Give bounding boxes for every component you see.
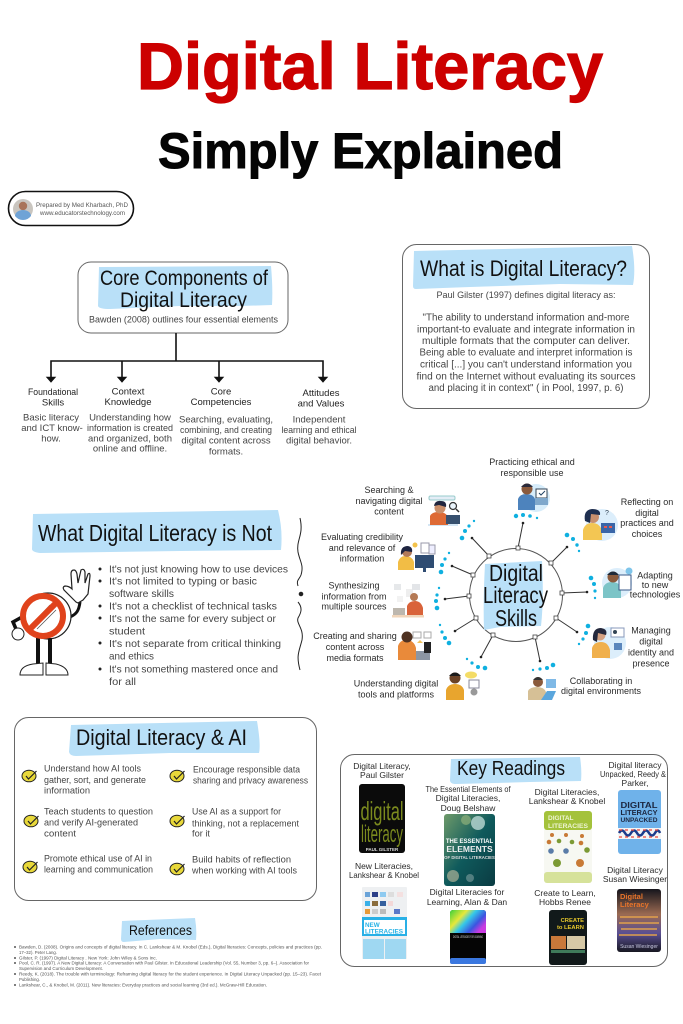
book label: Alan and Dan — [427, 887, 507, 907]
skill label: adapting: technologies — [630, 590, 681, 600]
hub title — [483, 560, 548, 631]
book cover: Create to Learn — [549, 910, 587, 965]
skill label: searching — [355, 485, 423, 516]
book label: Alan and Dan: Digital Literacies for — [430, 887, 504, 897]
skill label: searching: content — [374, 506, 404, 516]
reference list: Supervision and Curriculum Development. — [19, 966, 103, 971]
book cover: Essential Elements: OF DIGITAL LITERACIES — [444, 855, 495, 860]
book cover: New Literacies: LITERACIES — [365, 928, 403, 936]
component: foundational skills: Foundational — [28, 387, 78, 398]
skill label: understanding tools: tools and platforms — [358, 690, 435, 700]
reference list — [14, 944, 322, 988]
book cover: Create to Learn: to LEARN — [557, 925, 584, 931]
panel: what digital literacy is not — [12, 510, 303, 688]
bullet list: student — [109, 626, 145, 638]
book cover: Digital Literacy Wiesinger: Susan Wiesinger — [620, 944, 658, 950]
AI list: right column: sharing and privacy awareness — [193, 776, 308, 786]
skill label: reflecting: choices — [632, 529, 663, 539]
heading highlight — [450, 757, 581, 784]
illustration: adapting — [602, 568, 632, 598]
check icons — [22, 770, 184, 875]
heading: what digital literacy is not: What Digital Literacy is Not — [38, 520, 273, 546]
illustration: searching — [428, 496, 460, 526]
heading: core components: Digital Literacy — [120, 289, 247, 312]
book label: Lankshear Knobel: Lankshear & Knobel — [529, 796, 605, 806]
book cover: Digital Literacy Wiesinger: Digital — [620, 892, 643, 901]
AI list: right column: Use AI as a support for — [192, 806, 282, 818]
skill label: adapting: to new — [642, 580, 669, 590]
hub title: Digital — [489, 560, 543, 586]
book cover: Digital Literacy Wiesinger: Literacy — [620, 900, 650, 909]
book label: Hobbs: Hobbs Renee — [539, 897, 591, 907]
AI list: left column: content — [44, 828, 76, 840]
bullet list: It's not limited to typing or basic — [109, 576, 257, 588]
heading: references: References — [129, 922, 192, 938]
bullet list: and ethics — [109, 652, 154, 662]
book label: Alan and Dan: Learning, Alan & Dan — [427, 897, 507, 907]
reference list: Lankshear, C., & Knobel, M. (2011). New literacies: Everyday practices and social learning (3rd ed.). McGraw-Hill Education. — [19, 982, 267, 988]
book label: Belshaw: The Essential Elements of — [426, 784, 511, 794]
AI list: left column: information — [44, 786, 90, 796]
bullet list: It's not the same for every subject or — [109, 614, 277, 625]
book cover: New Literacies — [362, 887, 407, 959]
skill label: collaborating: Collaborating in — [570, 676, 632, 686]
skill label: understanding tools: Understanding digital — [354, 678, 438, 688]
book label: Reedy Parker: Digital literacy — [609, 760, 662, 770]
book label: Belshaw: Digital Literacies, — [436, 793, 500, 803]
reference list: Gilster, P. (1997) Digital Literacy . New York: John Wiley & Sons Inc. — [19, 956, 157, 960]
panel: core components — [78, 262, 288, 333]
heading highlight — [413, 246, 634, 289]
heading highlight — [98, 266, 272, 309]
book cover: Essential Elements: ELEMENTS — [446, 844, 493, 854]
book cover: Digital Literacy Unpacked: UNPACKED — [620, 817, 658, 824]
quote: and placing it in context" ( in Pool, 1997, p. 6) — [428, 383, 624, 394]
component: foundational skills: how. — [41, 434, 61, 444]
heading highlight — [32, 510, 282, 553]
bullet list — [98, 564, 288, 688]
book label: New Literacies — [349, 861, 419, 880]
component: attitudes and values: and Values — [298, 398, 345, 410]
book label: Belshaw — [426, 784, 511, 813]
skill label: practicing ethical — [489, 457, 575, 478]
skill label: reflecting: digital — [635, 508, 659, 518]
heading: what is digital literacy: What is Digital Literacy? — [420, 256, 627, 281]
skill label: synthesizing: Synthesizing — [328, 580, 380, 590]
skill label: synthesizing: multiple sources — [321, 602, 387, 612]
book cover: Digital Literacies for Learning — [450, 910, 486, 964]
subtitle: Bawden (2008) outlines four essential elements — [89, 314, 278, 324]
hub highlight — [484, 561, 543, 630]
component: attitudes and values — [282, 388, 356, 446]
component: foundational skills: Basic literacy — [23, 412, 79, 424]
quote: find on the Internet without evaluating its sources — [416, 372, 636, 382]
bullet list: for all — [109, 677, 136, 688]
component: foundational skills: Skills — [42, 398, 64, 408]
author badge — [8, 192, 134, 226]
book cover: Digital Literacies: DIGITAL — [548, 815, 574, 822]
AI list: left column: Understand how AI tools — [44, 764, 141, 774]
skill label: reflecting — [620, 497, 674, 539]
component: attitudes and values: Independent — [293, 414, 346, 426]
heading: key readings: Key Readings — [457, 757, 565, 780]
decorative divider — [297, 518, 303, 670]
illustration: understanding tools — [446, 672, 479, 700]
illustration: synthesizing — [392, 584, 424, 618]
book label: Gilster: Paul Gilster — [360, 770, 404, 780]
heading: core components: Core Components of — [100, 267, 268, 290]
AI list: right column: thinking, not a replacement — [192, 818, 299, 830]
AI list: right column: for it — [192, 828, 210, 840]
skill label: managing: digital — [639, 636, 663, 646]
book cover: Digital Literacy Wiesinger — [617, 889, 661, 952]
AI list: left column — [44, 764, 153, 876]
component: core competencies: formats. — [209, 446, 243, 458]
illustration: reflecting: ? — [605, 510, 609, 517]
book cover: Essential Elements: THE ESSENTIAL — [446, 839, 494, 845]
illustration: evaluating — [398, 542, 435, 572]
reference list: Pool, C. R. (1997). A New Digital Literacy: A Conversation with Paul Gilster. In Educational Leadership (Vol. 55, Number 3, pp. 6–). Association for — [19, 960, 310, 966]
heading: Digital Literacy: Digital Literacy — [137, 29, 603, 103]
book label: Hobbs — [534, 888, 596, 907]
heading: core components — [100, 267, 268, 312]
panel: references — [14, 918, 322, 988]
quote: critical [...] you can't understand information you — [420, 360, 632, 370]
skill label: creating — [313, 631, 397, 663]
skill label: creating: content across — [326, 642, 385, 652]
AI list: left column: learning and communication — [44, 864, 153, 876]
skill label: collaborating — [561, 676, 642, 696]
book label: Lankshear Knobel — [529, 787, 605, 806]
bullet list: It's not just knowing how to use devices — [109, 564, 288, 576]
component: context knowledge: Context — [112, 386, 145, 398]
skill label: evaluating: information — [340, 554, 384, 564]
book cover: Essential Elements — [444, 814, 495, 886]
bullet list: software skills — [109, 589, 174, 600]
skill label: creating: Creating and sharing — [313, 631, 397, 641]
quote: important-to evaluate and integrate information in — [417, 324, 635, 336]
book cover: Create to Learn: CREATE — [561, 918, 584, 924]
skill label: reflecting: practices and — [620, 518, 674, 528]
illustration: managing — [592, 627, 626, 659]
skill label: managing — [628, 626, 674, 668]
skill label: evaluating: and relevance of — [329, 543, 396, 553]
book label: Gilster: Digital Literacy, — [353, 761, 411, 771]
bullet list: It's not a checklist of technical tasks — [109, 602, 277, 612]
hub title: Skills — [495, 605, 537, 631]
component: context knowledge: Understanding how — [89, 412, 171, 424]
skill label: practicing ethical: responsible use — [500, 468, 564, 478]
reference list: Publishing. — [19, 977, 40, 982]
component: attitudes and values: learning and ethical — [282, 425, 356, 436]
book label: Reedy Parker: Unpacked, Reedy & — [600, 769, 666, 779]
reference list: 17–32). Peter Lang. — [19, 950, 57, 955]
book label: Wiesinger — [603, 865, 667, 884]
skill label: evaluating — [321, 532, 404, 564]
AI list: left column: and verify AI-generated — [44, 818, 138, 828]
AI list: right column: Build habits of reflection — [192, 854, 291, 866]
book label: Wiesinger: Susan Wiesinger — [603, 874, 667, 884]
book label: Gilster — [353, 761, 411, 780]
component: context knowledge: online and offline. — [93, 444, 167, 454]
illustration: creating — [398, 632, 431, 660]
heading: Simply Explained: Simply Explained — [158, 123, 563, 179]
bullet list: It's not something mastered once and — [109, 664, 278, 676]
book label: Hobbs: Create to Learn, — [534, 888, 596, 898]
AI list: right column: Encourage responsible data — [193, 764, 301, 776]
illustration: collaborating — [528, 677, 556, 700]
component: context knowledge: Knowledge — [104, 397, 152, 408]
component: context knowledge: information is created — [87, 423, 173, 434]
tree connector arrows — [48, 333, 326, 382]
skill label: managing: Managing — [631, 626, 671, 636]
book cover: Digital Literacy Unpacked: LITERACY — [620, 810, 658, 817]
title — [137, 29, 603, 179]
component: core competencies: combining, and creating — [180, 425, 272, 436]
skill label: understanding tools — [354, 678, 438, 700]
book label: New Literacies: New Literacies, — [355, 861, 413, 871]
icon: author photo — [13, 199, 33, 220]
book label: Reedy Parker: Parker, — [622, 778, 648, 788]
skill label: managing: identity and — [628, 648, 674, 658]
book cover: Digital Literacy Unpacked — [618, 790, 661, 854]
skill label: adapting — [630, 570, 681, 600]
component: core competencies — [179, 386, 273, 458]
quote: Being able to evaluate and interpret information is — [420, 348, 632, 358]
component: foundational skills: and ICT know- — [21, 423, 83, 434]
reference list: Reedy, K. (2018). The trouble with terminology: Reframing digital literacy for the student experience. In Digital Literacy Unpacked (pp. 15–23). Facet — [19, 972, 322, 976]
spokes with nodes — [444, 522, 588, 662]
illustration: practicing ethical — [518, 484, 550, 512]
book label: New Literacies: Lankshear & Knobel — [349, 870, 419, 880]
skill label: searching: navigating digital — [355, 496, 423, 506]
skills hub — [470, 548, 562, 642]
component: core competencies: digital content across — [181, 436, 271, 446]
component: core competencies: Searching, evaluating, — [179, 414, 273, 426]
dotted arcs — [434, 513, 597, 671]
skill label: synthesizing — [321, 580, 387, 612]
book cover: Digital Literacy, Gilster: PAUL GILSTER — [366, 847, 399, 852]
skill label: creating: media formats — [326, 653, 384, 663]
bullet list: It's not separate from critical thinking — [109, 639, 281, 650]
skill label: managing: presence — [632, 658, 670, 668]
quote — [416, 312, 636, 394]
AI list: left column: gather, sort, and generate — [44, 775, 146, 786]
author text: Prepared by Med Kharbach, PhD — [36, 202, 128, 209]
skill label: collaborating: digital environments — [561, 686, 642, 696]
skill label: evaluating: Evaluating credibility — [321, 532, 404, 542]
component: context knowledge — [87, 386, 173, 454]
heading: digital literacy and AI: Digital Literacy & AI — [76, 725, 247, 750]
book label: Belshaw: Doug Belshaw — [441, 803, 496, 813]
quote: "The ability to understand information and-more — [422, 312, 630, 324]
quote: multiple formats that the computer can deliver. — [422, 336, 630, 347]
book label: Wiesinger: Digital Literacy — [607, 865, 664, 875]
book cover: Digital Literacy, Gilster: literacy — [361, 821, 403, 848]
book cover: Digital Literacies — [544, 811, 592, 883]
component: attitudes and values: digital behavior. — [286, 436, 352, 446]
illustration: reflecting — [583, 509, 618, 541]
AI list: left column: Promote ethical use of AI in — [44, 854, 152, 864]
book label: Reedy Parker — [600, 760, 666, 788]
panel: digital literacy and AI — [14, 718, 316, 900]
skill label: searching: Searching & — [364, 485, 414, 495]
heading highlight — [69, 721, 260, 756]
component: foundational skills — [21, 387, 83, 444]
book cover: New Literacies: NEW — [365, 922, 380, 929]
AI list: right column — [191, 764, 308, 876]
panel: what is digital literacy — [402, 244, 650, 408]
book cover: Digital Literacy, Gilster: digital — [360, 796, 404, 826]
hub title: Literacy — [483, 582, 548, 608]
heading highlight — [121, 918, 196, 942]
component: attitudes and values: Attitudes — [303, 388, 340, 399]
author text — [36, 202, 128, 217]
panel: digital literacy skills diagram — [313, 457, 681, 700]
skill label: adapting: Adapting — [637, 570, 673, 580]
component: core competencies: Competencies — [191, 397, 252, 408]
reference list: Bawden, D. (2008). Origins and concepts of digital literacy. In C. Lankshear & M. Knobel (Eds.), Digital literacies: Concepts, policies and practices (pp. — [19, 944, 322, 950]
book cover: Digital Literacies: LITERACIES — [548, 823, 589, 830]
component: core competencies: Core — [211, 386, 231, 398]
AI list: right column: when working with AI tools — [191, 866, 297, 876]
component: context knowledge: and organized, both — [88, 434, 172, 444]
book label: Lankshear Knobel: Digital Literacies, — [535, 787, 599, 797]
author text: www.educatorstechnology.com — [39, 210, 125, 217]
book cover: Digital Literacies for Learning: DIGITAL LITERACIES FOR LEARNING — [453, 935, 483, 939]
skill label: reflecting: Reflecting on — [621, 497, 673, 507]
AI list: left column: Teach students to question — [44, 806, 153, 818]
skill label: synthesizing: information from — [321, 592, 387, 602]
subtitle: Paul Gilster (1997) defines digital literacy as: — [436, 290, 616, 301]
panel: key readings — [340, 754, 668, 966]
skill label: practicing ethical: Practicing ethical and — [489, 457, 575, 467]
book cover: Digital Literacy Unpacked: DIGITAL — [620, 800, 658, 810]
book cover: Digital Literacy, Gilster — [359, 784, 405, 853]
icon: stop sign character — [12, 569, 90, 675]
